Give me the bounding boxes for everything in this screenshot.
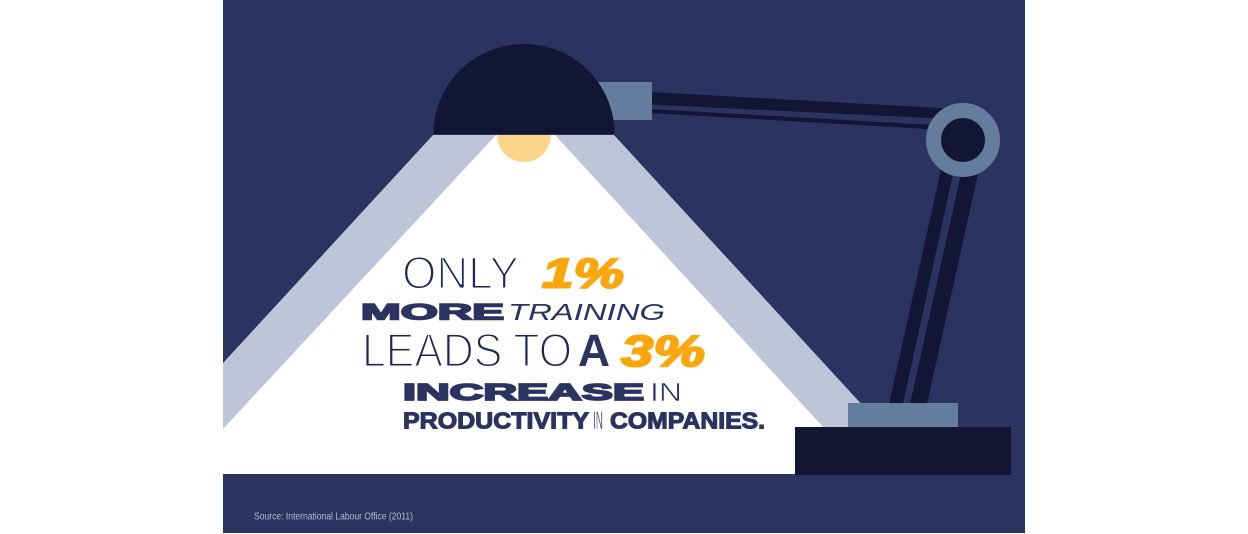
line: PRODUCTIVITY IN COMPANIES.: IN — [593, 407, 603, 435]
headline statistic text — [361, 248, 765, 435]
line: INCREASE IN — [403, 377, 682, 407]
icon: lamp light beam — [223, 135, 865, 474]
source note: Source: International Labour Office (2011) — [254, 512, 413, 522]
navy background panel — [223, 0, 1025, 533]
line: LEADS TO A 3% — [362, 324, 705, 376]
line: INCREASE IN: IN — [650, 377, 682, 407]
lamp base — [795, 427, 1011, 475]
line: PRODUCTIVITY IN COMPANIES.: PRODUCTIVITY — [403, 408, 589, 434]
lower arm bars — [889, 165, 980, 404]
line: MORE TRAINING: MORE — [361, 300, 504, 324]
lamp shade dome — [434, 44, 614, 134]
line: PRODUCTIVITY IN COMPANIES.: COMPANIES. — [610, 408, 765, 434]
line: PRODUCTIVITY IN COMPANIES. — [403, 407, 765, 435]
lamp base collar — [848, 403, 958, 427]
light bulb — [497, 135, 551, 162]
line: LEADS TO A 3%: 3% — [621, 327, 705, 376]
upper arm bars — [650, 92, 950, 130]
lamp head connector — [590, 82, 652, 120]
arm joint ring — [934, 110, 992, 170]
line: LEADS TO A 3%: A — [578, 325, 610, 376]
icon: desk lamp — [434, 44, 1011, 475]
outer light beam — [223, 135, 865, 429]
line: MORE TRAINING: TRAINING — [508, 299, 665, 325]
line: ONLY 1% — [402, 248, 624, 298]
line: LEADS TO A 3%: LEADS TO — [362, 324, 572, 376]
line: INCREASE IN: INCREASE — [403, 379, 644, 405]
inner white light pool — [223, 135, 823, 474]
line: ONLY 1%: 1% — [542, 250, 624, 296]
line: MORE TRAINING — [361, 299, 665, 325]
line: ONLY 1%: ONLY — [402, 248, 519, 298]
